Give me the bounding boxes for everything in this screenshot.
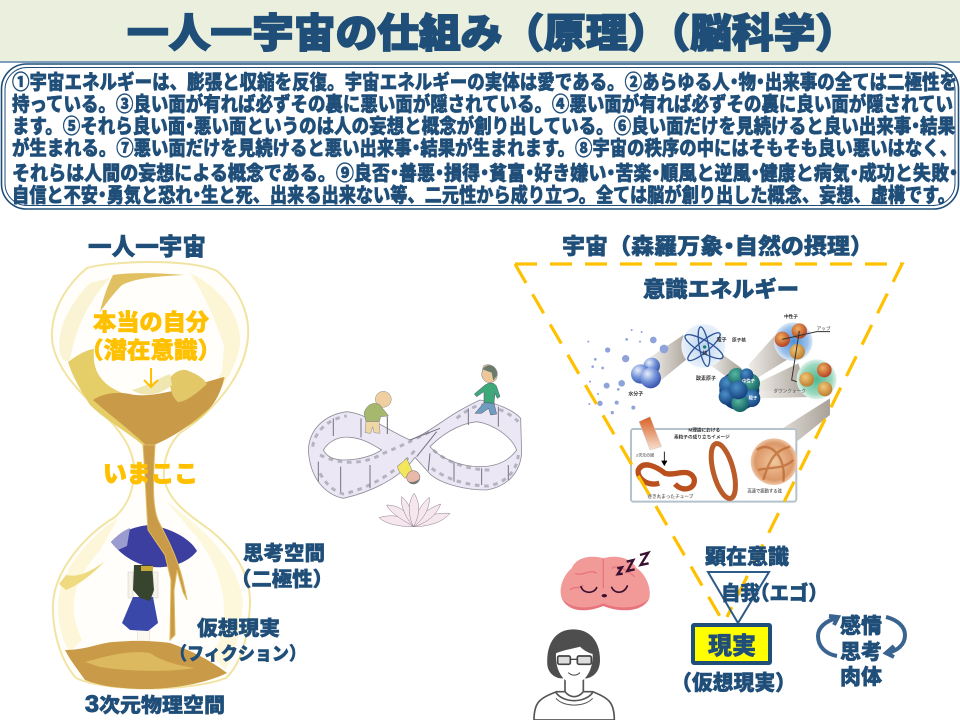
label: virtual reality paren: （仮想現実） xyxy=(671,672,796,695)
hourglass illustration xyxy=(52,262,250,689)
atom: 電子 xyxy=(717,337,727,344)
heading: one person one universe: 一人一宇宙 xyxy=(88,234,206,261)
label: ego: 自我（エゴ） xyxy=(721,581,818,605)
icon: woman with glasses xyxy=(534,629,614,720)
M-theory box xyxy=(631,417,797,502)
nucleus xyxy=(719,368,760,412)
M-theory box: 高速で振動する弦 xyxy=(747,488,783,495)
label: thought space: 思考空間 xyxy=(243,542,325,565)
panel: nine principles text: ①宇宙エネルギーは、膨張と収縮を反復。宇宙エネルギーの実体は愛である。②あらゆる人・物・出来事の全ては二極性を xyxy=(12,70,957,94)
M-theory box: 素粒子の成り立ちイメージ xyxy=(674,433,730,440)
lotus flower xyxy=(379,493,450,527)
title: 一人一宇宙の仕組み（原理）（脳科学） xyxy=(127,12,857,56)
arrow: yellow down xyxy=(144,368,158,387)
box: reality xyxy=(693,625,770,663)
panel: nine principles text xyxy=(2,64,958,209)
upper sand xyxy=(68,349,225,447)
label: reality: 現実 xyxy=(708,633,756,660)
tumbling child xyxy=(397,458,420,484)
arrow: left cycle xyxy=(818,616,838,656)
small triangle: ego xyxy=(708,572,769,623)
proton quarks xyxy=(773,359,837,399)
label: manifest consciousness: 顕在意識 xyxy=(705,546,789,569)
label: body: 肉体 xyxy=(840,666,882,689)
film band xyxy=(308,400,522,498)
label: emotion: 感情 xyxy=(840,614,882,638)
atom: 酸素原子 xyxy=(696,375,716,382)
icon: sleeping brain xyxy=(561,553,650,610)
title banner xyxy=(0,0,960,63)
panel: nine principles text: それらは人間の妄想による概念である。⑨良否・善悪・損得・貧富・好き嫌い・苦楽・順風と逆風・健康と病気・成功と失敗・ xyxy=(12,161,958,185)
nucleus: 陽子 xyxy=(749,395,758,402)
label: here and now: いまここ xyxy=(103,461,198,488)
label: water molecule: 水分子 xyxy=(628,391,643,398)
walking man xyxy=(474,365,500,415)
M-theory box: M理論における xyxy=(688,427,720,434)
atom: 核 xyxy=(703,350,708,357)
atom xyxy=(681,324,746,382)
M-theory box: 巻き丸まったチューブ xyxy=(647,493,694,500)
label: duality: （二極性） xyxy=(231,568,333,591)
proton quarks: ダウンクォーク xyxy=(773,387,806,394)
glass body xyxy=(52,262,250,688)
label: subconscious: （潜在意識） xyxy=(80,337,221,363)
old man xyxy=(364,391,391,434)
water molecules xyxy=(587,329,668,414)
arrow: right cycle xyxy=(886,617,905,657)
nucleus: 中性子 xyxy=(742,378,756,385)
label: virtual reality: 仮想現実 xyxy=(197,617,280,640)
illustration: particle physics diagram xyxy=(587,313,837,502)
M-theory box: 2次元の膜 xyxy=(636,451,654,457)
neutron quarks xyxy=(774,313,831,385)
atom: 原子核 xyxy=(732,336,746,343)
heading: conscious energy: 意識エネルギー xyxy=(643,277,799,302)
lower sand xyxy=(65,641,227,689)
label: fiction: （フィクション） xyxy=(170,644,306,664)
sand stream xyxy=(143,445,187,640)
girl with umbrella xyxy=(111,525,197,658)
illustration: infinity film strip xyxy=(308,365,522,527)
label: true self: 本当の自分 xyxy=(93,309,209,335)
label: thought: 思考 xyxy=(840,641,882,664)
heading: universe: 宇宙（森羅万象 ・自然の摂理） xyxy=(562,234,873,259)
neutron quarks: アップ xyxy=(817,325,831,332)
perspective cones xyxy=(650,332,830,442)
label: 3D physical space: 3次元物理空間 xyxy=(85,691,225,718)
neutron quarks: 中性子 xyxy=(784,313,798,320)
dashed triangle: universe xyxy=(515,264,902,625)
